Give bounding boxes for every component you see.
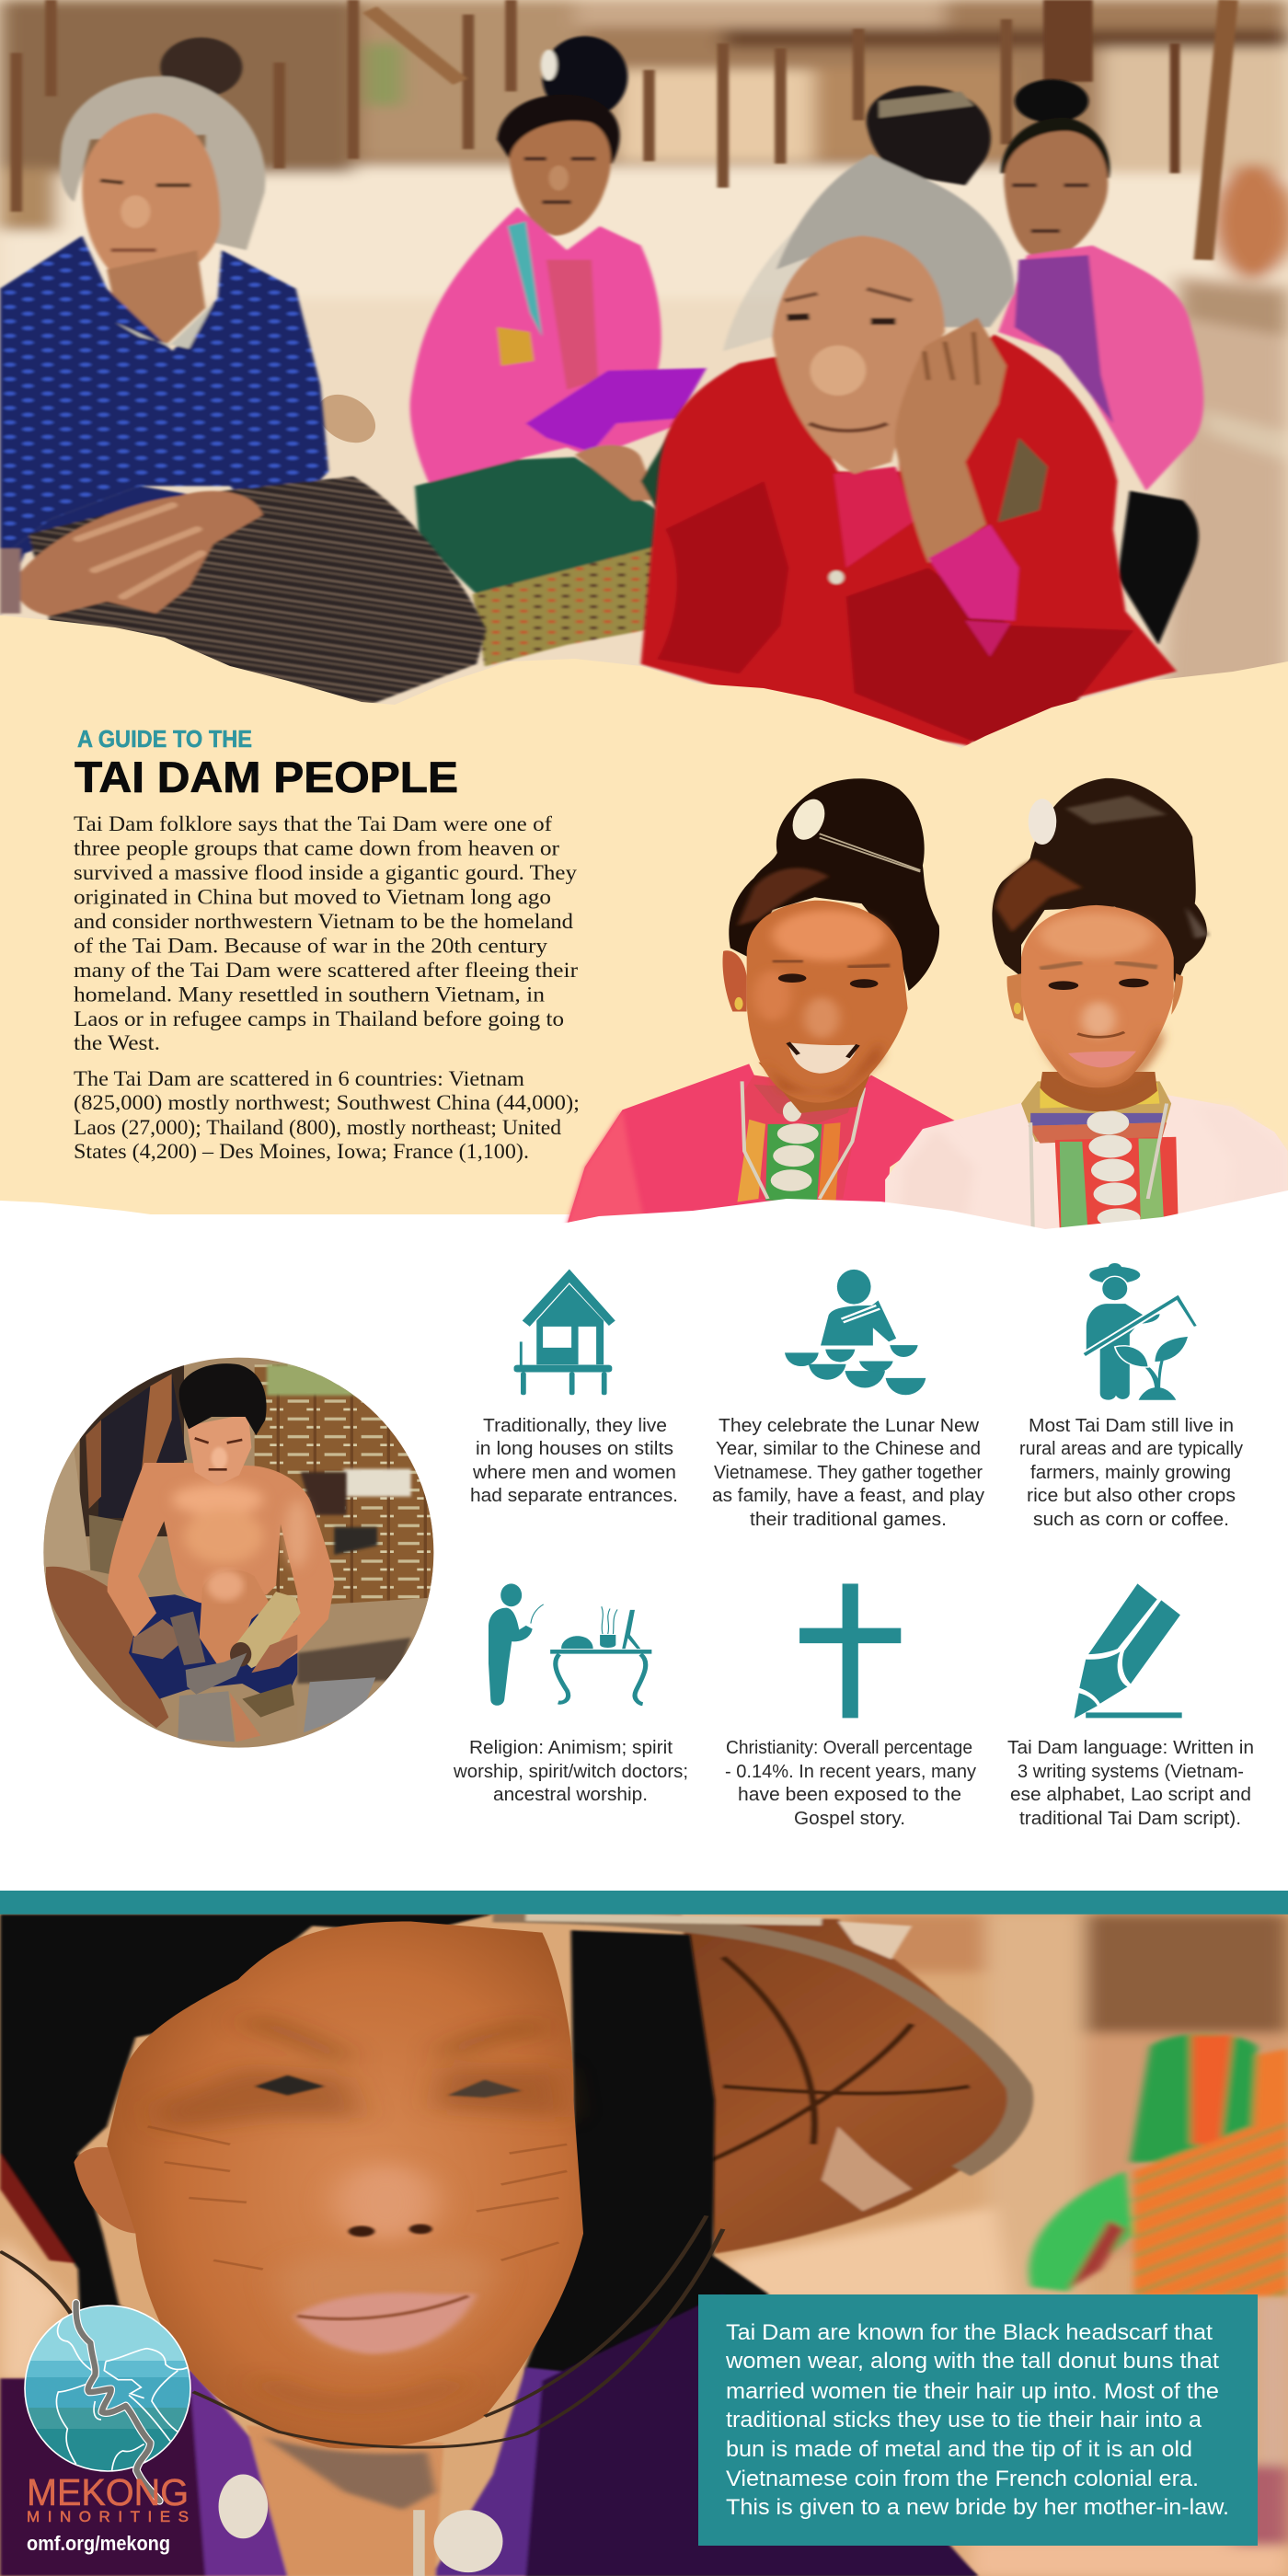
blurred background <box>0 1915 1288 2576</box>
icon: farmer with hoe and plant <box>1082 1263 1197 1400</box>
woman right in white blouse <box>885 778 1288 1240</box>
red cloth and black headscarf <box>0 1915 978 2576</box>
intro text: population by country <box>74 1067 580 1163</box>
text: lunar new year: Vietnamese. They gather together <box>714 1463 983 1483</box>
intro text: folklore and origins <box>74 812 578 1054</box>
icon grid: six facts about Tai Dam life <box>453 1263 1254 1829</box>
icon: person with bowls and chopsticks <box>785 1270 926 1395</box>
text: christianity: have been exposed to the <box>738 1785 961 1805</box>
callout: teal box about headscarf and buns <box>698 2294 1258 2546</box>
callout: teal box about headscarf and buns: married women tie their hair up into. Most of the <box>726 2379 1219 2404</box>
intro text: folklore and origins: homeland. Many resettled in southern Vietnam, in <box>74 983 546 1006</box>
woman at back right <box>998 79 1203 645</box>
text: language: Tai Dam language: Written in <box>1007 1738 1254 1758</box>
intro text: folklore and origins: originated in China but moved to Vietnam long ago <box>74 885 551 909</box>
woman left in pink blouse <box>566 778 956 1236</box>
callout: teal box about headscarf and buns: bun is made of metal and the tip of it is an old <box>726 2437 1192 2462</box>
callout: teal box about headscarf and buns: women wear, along with the tall donut buns that <box>725 2349 1219 2374</box>
woman in pink <box>410 36 707 666</box>
text: lunar new year <box>712 1416 984 1530</box>
intro text: folklore and origins: Laos or in refugee camps in Thailand before going to <box>74 1007 564 1030</box>
text: lunar new year: as family, have a feast, and play <box>712 1486 984 1506</box>
kicker: a guide to the: A GUIDE TO THE <box>77 725 252 753</box>
heading: Tai Dam People: TAI DAM PEOPLE <box>75 753 458 801</box>
text: language: 3 writing systems (Vietnam- <box>1018 1762 1244 1782</box>
intro text: folklore and origins: and consider northwestern Vietnam to be the homeland <box>74 910 574 933</box>
text: rural farmers <box>1019 1416 1243 1530</box>
text: long houses: Traditionally, they live <box>483 1416 667 1436</box>
logo wordmark: MINORITIES <box>27 2508 189 2525</box>
callout: teal box about headscarf and buns: Vietnamese coin from the French colonial era. <box>726 2467 1199 2491</box>
icon: pencil writing <box>1075 1583 1182 1719</box>
intro text: folklore and origins: Tai Dam folklore says that the Tai Dam were one of <box>74 812 552 835</box>
text: christianity <box>725 1738 976 1829</box>
url: omf.org/mekong <box>27 2532 170 2555</box>
text: long houses: in long houses on stilts <box>476 1439 673 1459</box>
text: lunar new year: They celebrate the Lunar New <box>719 1416 980 1436</box>
text: christianity: - 0.14%. In recent years, many <box>725 1762 976 1782</box>
clothing: purple shirt <box>0 2294 978 2576</box>
callout: teal box about headscarf and buns: This is given to a new bride by her mother-in-law. <box>726 2495 1229 2520</box>
logo wordmark: MEKONG <box>27 2471 189 2513</box>
face <box>74 1921 583 2449</box>
text: rural farmers: such as corn or coffee. <box>1033 1510 1229 1530</box>
text: rural farmers: farmers, mainly growing <box>1030 1463 1231 1483</box>
callout: teal box about headscarf and buns: Tai Dam are known for the Black headscarf that <box>726 2320 1213 2345</box>
intro text: folklore and origins: many of the Tai Dam were scattered after fleeing their <box>74 959 578 982</box>
photo: four Tai Dam women seated in a village <box>0 0 1288 754</box>
necklace, buttons and hat strap <box>0 2215 723 2576</box>
text: lunar new year: Year, similar to the Chinese and <box>716 1439 981 1459</box>
logo emblem: river map circle <box>23 2300 198 2501</box>
title block <box>75 725 458 801</box>
photo: shirtless man forging a blade, in circle <box>40 1355 439 1754</box>
divider: teal bar <box>0 1891 1288 1915</box>
background: village and ground <box>0 0 1288 754</box>
intro text: folklore and origins: of the Tai Dam. Because of war in the 20th century <box>74 935 548 957</box>
panel: white body with torn top edge <box>0 1190 1288 1895</box>
text: religion: worship, spirit/witch doctors; <box>453 1762 688 1782</box>
text: christianity: Gospel story. <box>794 1809 905 1829</box>
text: rural farmers: Most Tai Dam still live in <box>1029 1416 1234 1436</box>
text: rural farmers: rural areas and are typically <box>1019 1439 1243 1459</box>
icon: cross <box>799 1583 901 1718</box>
intro text: population by country: (825,000) mostly northwest; Southwest China (44,000); <box>74 1091 580 1114</box>
intro text: folklore and origins: three people groups that came down from heaven or <box>74 837 559 859</box>
man figure <box>46 1363 375 1742</box>
panel: cream intro background with torn edges <box>0 615 1288 1214</box>
text: long houses: where men and women <box>472 1463 676 1483</box>
photo: elderly woman in conical hat <box>0 1915 1288 2576</box>
intro text: population by country: States (4,200) – Des Moines, Iowa; France (1,100). <box>74 1140 529 1163</box>
text: rural farmers: rice but also other crops <box>1027 1486 1236 1506</box>
text: religion: Religion: Animism; spirit <box>469 1738 673 1758</box>
woman in red, foreground <box>641 86 1177 746</box>
text: long houses <box>470 1416 678 1506</box>
photo: two smiling Tai Dam women cut out <box>566 778 1288 1240</box>
woman in blue <box>0 38 487 707</box>
text: lunar new year: their traditional games. <box>750 1510 947 1530</box>
conical hat <box>493 1915 1020 2254</box>
intro text: folklore and origins: survived a massive flood inside a gigantic gourd. They <box>74 861 578 884</box>
background bamboo and ground <box>40 1355 439 1754</box>
text: long houses: had separate entrances. <box>470 1486 678 1506</box>
text: language: ese alphabet, Lao script and <box>1010 1785 1251 1805</box>
icon: person at altar with incense <box>489 1583 651 1706</box>
text: language <box>1007 1738 1254 1829</box>
intro text: population by country: The Tai Dam are scattered in 6 countries: Vietnam <box>74 1067 524 1090</box>
intro text: folklore and origins: the West. <box>74 1031 160 1054</box>
text: christianity: Christianity: Overall percentage <box>726 1738 972 1758</box>
logo: Mekong Minorities <box>23 2300 198 2555</box>
knitted hat in background <box>1029 2034 1288 2296</box>
intro text: population by country: Laos (27,000); Thailand (800), mostly northeast; United <box>74 1116 562 1139</box>
text: language: traditional Tai Dam script). <box>1019 1809 1241 1829</box>
text: religion: ancestral worship. <box>493 1785 648 1805</box>
icon: stilt house <box>514 1269 615 1395</box>
callout: teal box about headscarf and buns: traditional sticks they use to tie their hair into a <box>726 2408 1202 2432</box>
text: religion <box>453 1738 688 1805</box>
